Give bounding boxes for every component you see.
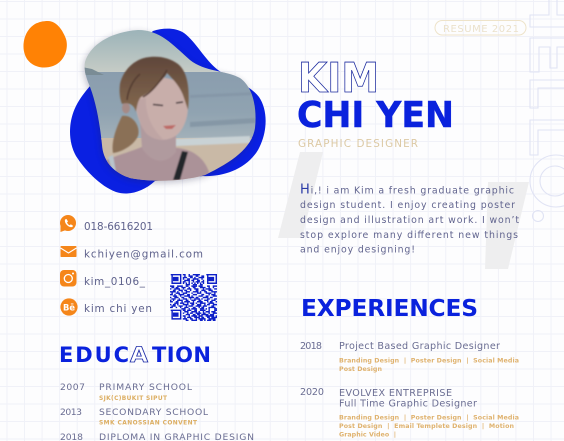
contact: behance icon xyxy=(60,298,78,316)
hair xyxy=(120,57,189,112)
shoulders xyxy=(106,146,210,181)
big opening quote mark xyxy=(278,152,323,238)
name: KIM: KIM xyxy=(298,54,379,102)
orange blob xyxy=(23,21,67,68)
education timeline xyxy=(60,382,254,441)
education heading xyxy=(59,343,211,367)
experience 2020: EVOLVEX ENTREPRISE xyxy=(339,388,452,399)
experience 2018: Post Design xyxy=(339,366,382,373)
intro paragraph: Hi,! i am Kim a fresh graduate graphic xyxy=(300,182,514,198)
education timeline: SECONDARY SCHOOL xyxy=(99,407,209,418)
experiences heading: EXPERIENCES xyxy=(301,295,478,322)
education heading: A xyxy=(130,343,149,367)
role: GRAPHIC DESIGNER xyxy=(298,138,418,150)
face shadow xyxy=(138,100,160,138)
ear xyxy=(122,102,130,114)
vertical outlined HELLO lettering xyxy=(530,0,564,222)
experience 2020: Full Time Graphic Designer xyxy=(339,398,477,410)
experience 2020 xyxy=(300,387,519,440)
eyes and lips xyxy=(153,102,183,106)
intro paragraph: and enjoy designing! xyxy=(300,244,415,256)
contact: instagram handle: kim_0106_ xyxy=(84,276,146,288)
QR code xyxy=(170,275,217,320)
blue blob behind photo xyxy=(70,29,266,194)
photo shadow xyxy=(84,32,255,183)
education timeline: 2007 xyxy=(60,382,85,393)
experience 2018 xyxy=(300,341,519,373)
contact: mail icon xyxy=(60,246,76,257)
experience 2020: 2020 xyxy=(300,387,324,398)
intro paragraph: design and illustration art work. I won’t xyxy=(300,215,519,226)
experience 2020: Post Design | Email Templete Design | Motion xyxy=(339,423,514,431)
education timeline: SJK(C)BUKIT SIPUT xyxy=(99,396,167,402)
contact: phone number: 018-6616201 xyxy=(84,221,153,233)
contact: behance icon: Bē xyxy=(63,304,75,314)
contact: behance name: kim chi yen xyxy=(84,303,152,315)
name: CHI YEN: CHI YEN xyxy=(297,95,454,136)
resume 2021 badge: RESUME 2021 xyxy=(443,24,519,35)
contact: phone icon xyxy=(60,215,76,232)
contact: email: kchiyen@gmail.com xyxy=(84,248,203,260)
experience 2018: Branding Design | Poster Design | Social Media xyxy=(339,358,519,366)
profile photo xyxy=(80,28,260,186)
intro paragraph: design student. I enjoy creating poster xyxy=(300,200,515,211)
intro paragraph xyxy=(300,182,519,256)
hair strands xyxy=(127,70,167,100)
light left strap xyxy=(108,155,116,172)
experience 2020: Branding Design | Poster Design | Social Media xyxy=(339,414,519,422)
education timeline: 2013 xyxy=(60,407,82,418)
big closing quote mark xyxy=(485,182,529,269)
experience 2020: Graphic Video | xyxy=(339,432,396,440)
experience 2018: Project Based Graphic Designer xyxy=(339,341,500,352)
strap xyxy=(173,151,188,180)
experience 2018: 2018 xyxy=(300,341,322,352)
education heading: EDUC xyxy=(59,343,129,367)
face xyxy=(136,78,188,140)
neck xyxy=(140,124,176,148)
education heading: TION xyxy=(152,343,211,367)
education timeline: PRIMARY SCHOOL xyxy=(99,382,193,393)
ponytail xyxy=(113,116,139,153)
intro paragraph: stop explore many different new things xyxy=(300,230,518,241)
resume 2021 badge xyxy=(435,20,526,35)
education timeline: SMK CANOSSIAN CONVENT xyxy=(99,420,197,426)
contact: instagram icon xyxy=(60,270,76,286)
